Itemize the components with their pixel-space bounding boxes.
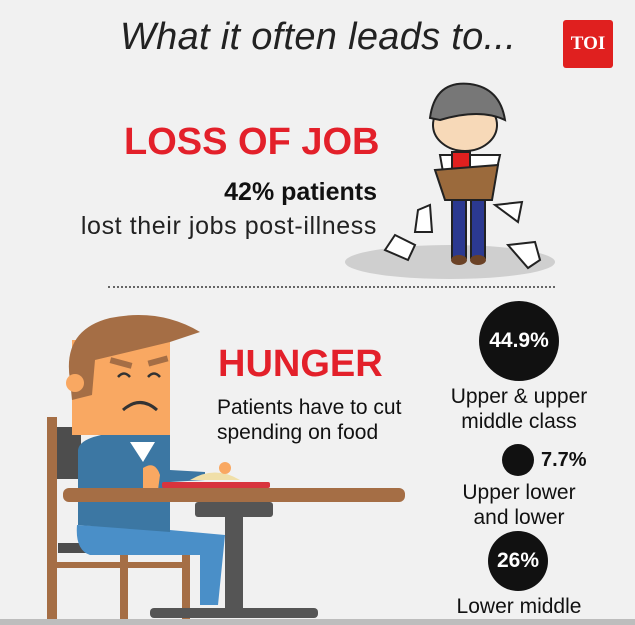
divider xyxy=(108,286,555,288)
text: hunger description: Patients have to cut xyxy=(217,396,401,419)
stat: 26% xyxy=(488,531,548,591)
text: hunger description: spending on food xyxy=(217,421,378,444)
logo: TOI: TOI xyxy=(571,33,605,54)
text: lost jobs: lost their jobs post-illness xyxy=(81,212,377,240)
label: lower middle: Lower middle xyxy=(457,595,581,618)
label: upper class: middle class xyxy=(461,410,577,433)
illustration: sad man at table xyxy=(47,315,405,619)
title: What it often leads to... xyxy=(120,16,516,58)
label: upper class xyxy=(451,385,587,433)
label: upper class: Upper & upper xyxy=(451,385,587,408)
label: upper lower xyxy=(462,481,576,529)
heading: hunger: HUNGER xyxy=(218,343,383,385)
text: 42% patients: 42% patients xyxy=(224,178,377,206)
stat: 26%: 26% xyxy=(497,549,539,572)
stat: 7.7% xyxy=(502,444,534,476)
stat: 44.9%: 44.9% xyxy=(489,329,549,352)
heading: loss of job: LOSS OF JOB xyxy=(124,121,379,163)
illustration: man with box xyxy=(345,82,555,279)
stat: 44.9% xyxy=(479,301,559,381)
bottom strip xyxy=(0,619,635,625)
text: 7.7% xyxy=(541,449,587,471)
label: upper lower: Upper lower xyxy=(462,481,576,504)
logo: TOI xyxy=(563,20,613,68)
label: upper lower: and lower xyxy=(473,506,565,529)
text: hunger description xyxy=(217,396,402,444)
